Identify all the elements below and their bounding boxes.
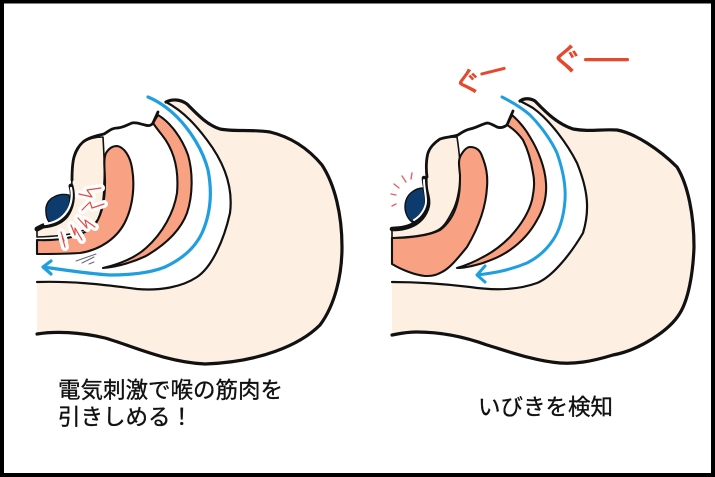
palate outline <box>72 112 158 180</box>
head and neck body <box>392 99 694 363</box>
motion lines <box>76 254 96 264</box>
tongue <box>37 146 133 254</box>
mouth front beige area <box>37 137 104 237</box>
panel: snore detection <box>391 97 694 363</box>
alert rays <box>391 173 412 206</box>
mouth front beige area <box>392 137 460 238</box>
snore sound: left <box>451 58 511 101</box>
snore sound: right <box>551 42 629 77</box>
nostril outline <box>37 186 72 229</box>
panel: electrical stimulation <box>37 97 342 364</box>
snore sound: right: ぐ <box>551 42 582 77</box>
palate outline <box>426 111 513 177</box>
tongue <box>392 147 487 276</box>
lightning bolts <box>61 188 104 247</box>
nostril outline <box>392 178 428 229</box>
caption: electrical stimulation: 引きしめる！ <box>58 405 193 430</box>
airflow arrow <box>477 97 565 282</box>
head and neck body <box>37 100 342 364</box>
nose <box>405 188 425 222</box>
back of throat muscle <box>457 115 546 268</box>
airflow arrow <box>43 97 210 275</box>
caption: electrical stimulation: 電気刺激で喉の筋肉を <box>58 378 283 403</box>
caption: snore detection: いびきを検知 <box>478 395 613 420</box>
back of throat muscle <box>103 115 192 268</box>
snore sound: left: ぐ <box>451 64 485 101</box>
nose <box>46 194 70 222</box>
